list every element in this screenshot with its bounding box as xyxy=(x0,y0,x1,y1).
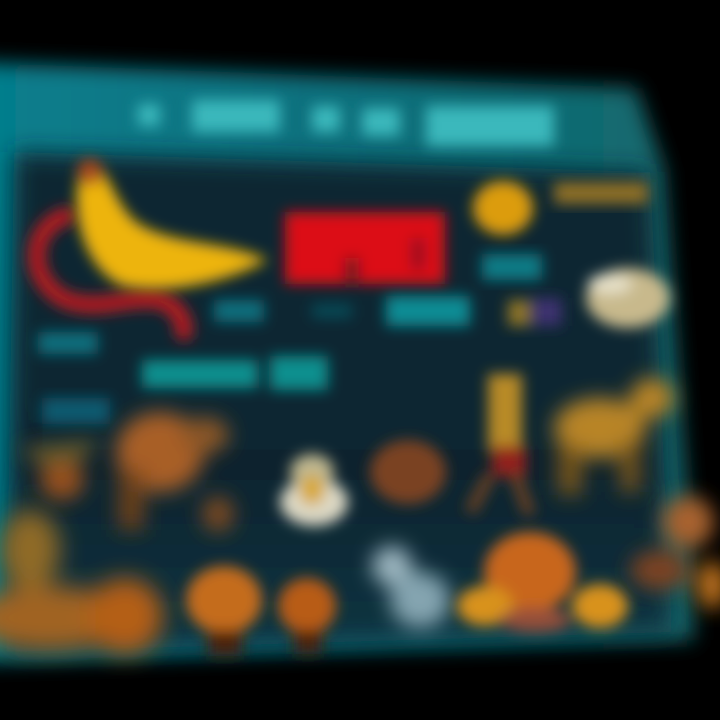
teal caption xyxy=(482,254,542,280)
icon: red ring xyxy=(37,216,184,332)
icon: orange fruit xyxy=(186,566,262,656)
icon: cream bowl xyxy=(586,268,670,328)
title xyxy=(138,100,554,146)
icon: golden horse xyxy=(554,378,674,495)
icon: banana xyxy=(77,159,268,289)
icon: gold coin xyxy=(473,181,533,235)
left small teal caption xyxy=(42,398,110,424)
icon: white bird xyxy=(280,454,348,526)
icon: orange pile bottom left xyxy=(0,510,163,654)
panel: dark inner board xyxy=(6,152,672,652)
icon: brown creature xyxy=(370,440,446,504)
icon: small orange fruit xyxy=(278,578,336,654)
red sign xyxy=(285,212,445,284)
small purple and gold marker xyxy=(508,298,562,326)
icon: standing figure xyxy=(470,374,530,515)
label blocks under banana xyxy=(38,296,470,354)
icon: brown animal xyxy=(20,412,234,532)
subheading xyxy=(142,356,328,390)
icon: orange fruit group xyxy=(457,532,628,632)
icon: pale blue animal xyxy=(372,546,450,628)
icon: brown animal right xyxy=(630,496,720,609)
gold caption xyxy=(554,182,648,204)
